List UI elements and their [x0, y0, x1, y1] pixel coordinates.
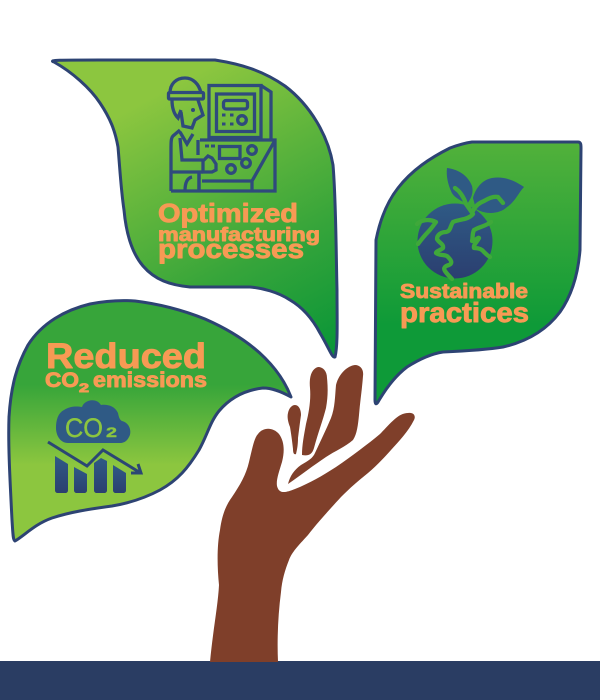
heading: optimized manufacturing processes: manufacturing	[158, 225, 320, 246]
panel: optimized manufacturing processes leaf	[53, 60, 337, 357]
icon: CO2 cloud with falling chart: CO	[65, 413, 103, 443]
heading: reduced CO2 emissions: Reduced	[46, 337, 206, 376]
heading: reduced CO2 emissions	[45, 337, 207, 395]
icon: factory worker at control panel	[168, 78, 275, 191]
hand	[210, 365, 415, 662]
footer bar	[0, 661, 600, 700]
heading: reduced CO2 emissions: 2	[79, 381, 89, 395]
heading: sustainable practices	[400, 281, 529, 328]
heading: optimized manufacturing processes	[158, 198, 320, 264]
icon: CO2 cloud with falling chart	[48, 400, 141, 493]
panel: reduced CO2 emissions leaf	[9, 301, 291, 541]
heading: optimized manufacturing processes: Optimized	[158, 198, 298, 228]
leaf shape: left	[9, 301, 291, 541]
leaf shape: top	[53, 60, 337, 357]
icon: earth with sprouting leaves	[417, 168, 524, 279]
heading: sustainable practices: practices	[400, 297, 529, 328]
leaf shape: right	[375, 142, 581, 404]
icon: CO2 cloud with falling chart: 2	[106, 424, 117, 440]
heading: reduced CO2 emissions: CO	[45, 369, 79, 392]
heading: sustainable practices: Sustainable	[400, 281, 528, 303]
panel: sustainable practices leaf	[375, 142, 581, 404]
heading: optimized manufacturing processes: processes	[158, 234, 304, 264]
heading: reduced CO2 emissions: emissions	[93, 369, 207, 392]
